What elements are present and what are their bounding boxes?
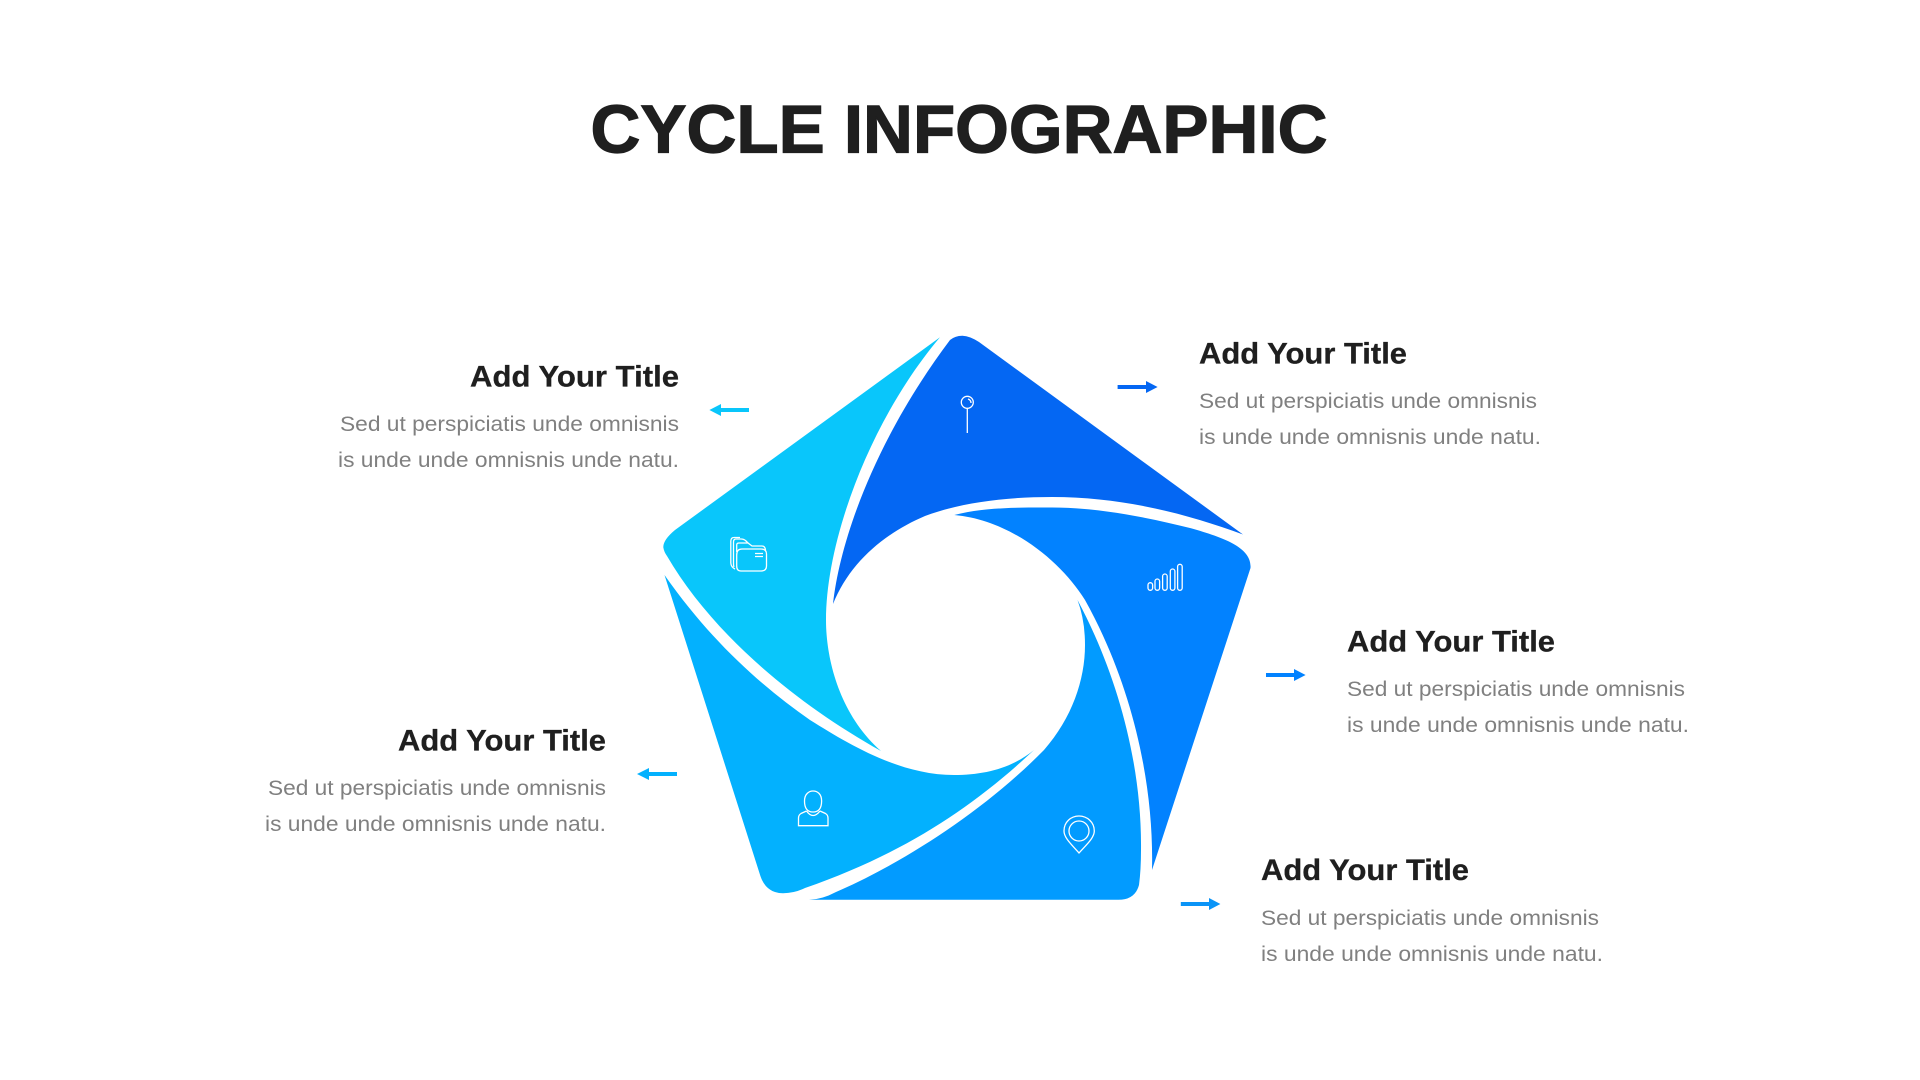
arrow: top right	[1118, 381, 1158, 393]
text block: top left	[338, 360, 679, 472]
segment: top left cyan	[663, 337, 940, 751]
text block: top right: Sed ut perspiciatis unde omnisnis	[1199, 390, 1537, 413]
text block: bottom right: Sed ut perspiciatis unde omnisnis	[1261, 907, 1599, 930]
text block: middle right: Add Your Title	[1347, 626, 1555, 658]
text block: top right	[1199, 338, 1541, 449]
text block: bottom left: is unde unde omnisnis unde natu.	[265, 813, 606, 836]
arrow: middle right	[1266, 669, 1306, 681]
text block: top left: Add Your Title	[470, 360, 679, 394]
text block: top right: Add Your Title	[1199, 338, 1407, 370]
title: CYCLE INFOGRAPHIC	[590, 92, 1328, 168]
text block: middle right: Sed ut perspiciatis unde omnisnis	[1347, 678, 1685, 701]
text block: middle right: is unde unde omnisnis unde natu.	[1347, 714, 1689, 737]
icon: signal bars	[1148, 564, 1182, 590]
text block: bottom left	[265, 724, 606, 836]
cycle diagram	[663, 336, 1251, 900]
text block: middle right	[1347, 626, 1689, 737]
arrow: bottom right	[1181, 898, 1220, 910]
text block: top left: Sed ut perspiciatis unde omnisnis	[340, 413, 679, 436]
segment: bottom left sky blue	[664, 575, 1034, 893]
icon: pin	[961, 396, 973, 433]
text block: bottom left: Add Your Title	[398, 724, 606, 758]
text block: bottom right	[1261, 854, 1603, 966]
text block: top right: is unde unde omnisnis unde natu.	[1199, 426, 1541, 449]
icon: folder	[731, 538, 766, 571]
text block: bottom right: Add Your Title	[1261, 854, 1469, 887]
text block: top left: is unde unde omnisnis unde natu.	[338, 449, 679, 472]
text block: bottom right: is unde unde omnisnis unde natu.	[1261, 943, 1603, 966]
segment: right blue	[954, 507, 1251, 870]
segment: top dark blue	[833, 336, 1243, 604]
icon: map marker	[1064, 816, 1094, 853]
text block: bottom left: Sed ut perspiciatis unde omnisnis	[268, 777, 606, 800]
arrow: bottom left	[637, 768, 677, 780]
arrow: top left	[709, 404, 749, 416]
segment: bottom right blue	[809, 600, 1141, 900]
icon: person	[798, 791, 828, 826]
